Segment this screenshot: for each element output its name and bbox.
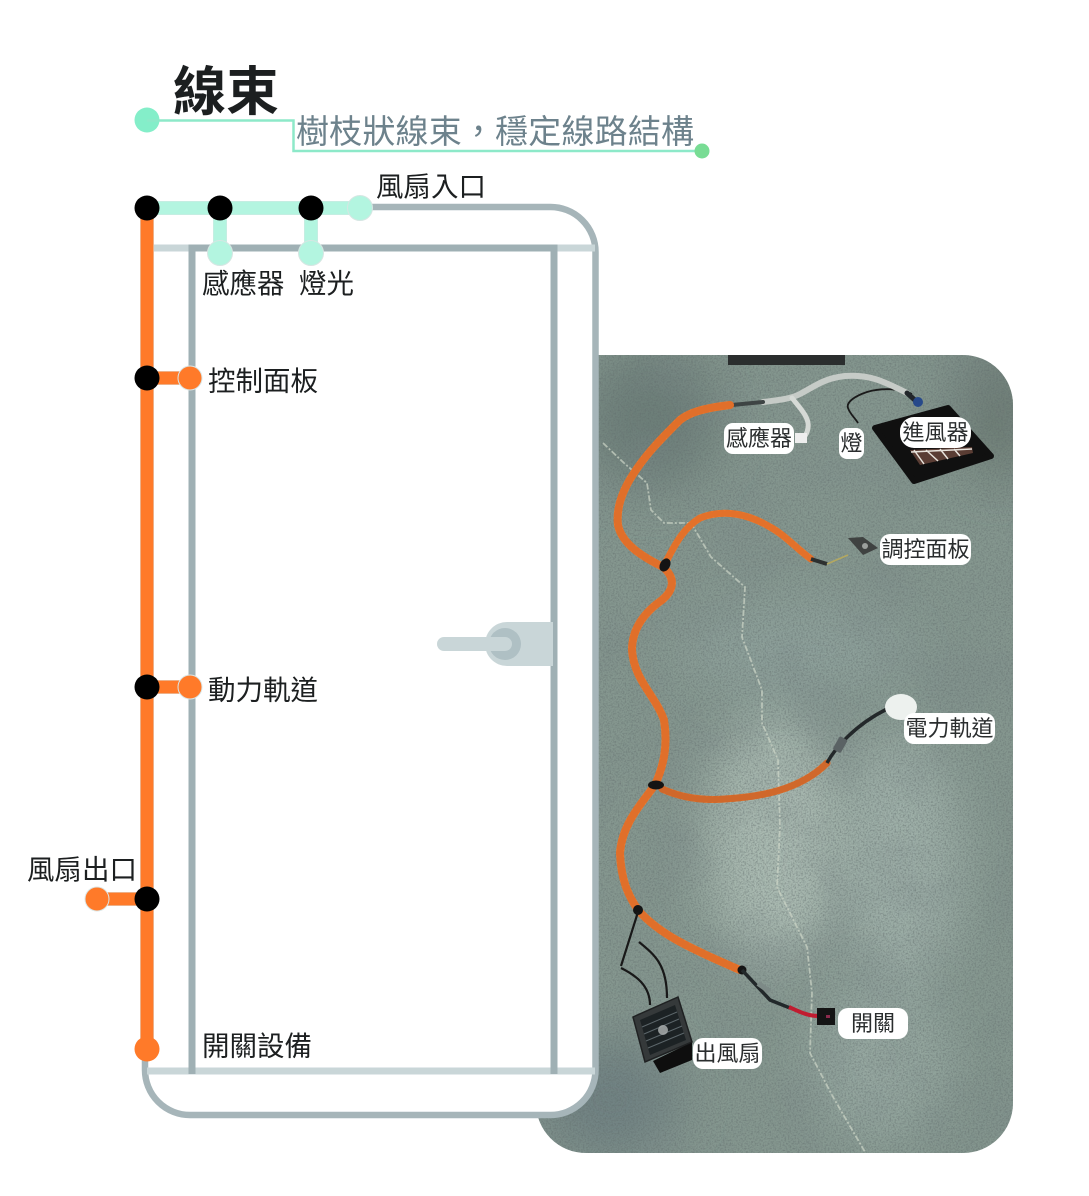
label: control panel: 調控面板 <box>881 537 970 562</box>
door handle <box>437 622 553 666</box>
diagram labels: 風扇入口 <box>376 171 486 202</box>
mint sensor line <box>147 196 372 266</box>
label: switch: 開關 <box>851 1011 895 1036</box>
control panel connector <box>811 537 878 564</box>
junction nodes <box>134 196 324 912</box>
subtitle with connector line <box>134 108 710 158</box>
diagram labels <box>27 171 486 1062</box>
diagram labels: 動力軌道 <box>208 674 318 706</box>
door outline <box>145 207 596 1115</box>
photo labels <box>693 417 995 1069</box>
label: power track: 電力軌道 <box>905 716 994 741</box>
title: 線束 <box>173 63 279 122</box>
orange power line <box>85 208 202 1062</box>
power-track light and wire <box>827 694 917 763</box>
floor cracks <box>603 443 865 1152</box>
subtitle with connector line: 樹枝狀線束，穩定線路結構 <box>296 113 694 150</box>
dark object at top edge <box>728 355 845 365</box>
diagram labels: 燈光 <box>299 268 354 299</box>
photo: wiring harness on concrete floor <box>530 340 1040 1160</box>
cable ties <box>633 556 746 974</box>
diagram labels: 感應器 <box>202 268 284 299</box>
label: air intake: 進風器 <box>902 420 969 445</box>
label: switch <box>838 1008 908 1039</box>
diagram labels: 開關設備 <box>202 1030 312 1062</box>
diagram labels: 控制面板 <box>208 366 318 396</box>
label: sensor: 感應器 <box>726 426 792 451</box>
door top and bottom rails <box>147 248 595 1071</box>
door inner frame <box>192 248 554 1074</box>
label: fan outlet: 出風扇 <box>694 1041 761 1066</box>
grey sleeved cable <box>732 376 923 443</box>
orange braided main cable <box>618 405 827 970</box>
fan outlet box and wires <box>621 912 692 1073</box>
switch wires and connector <box>742 970 835 1025</box>
label: lamp: 燈 <box>840 431 863 456</box>
diagram labels: 風扇出口 <box>27 854 137 885</box>
thin black lamp wire <box>848 389 912 423</box>
black air-intake box <box>875 408 991 481</box>
